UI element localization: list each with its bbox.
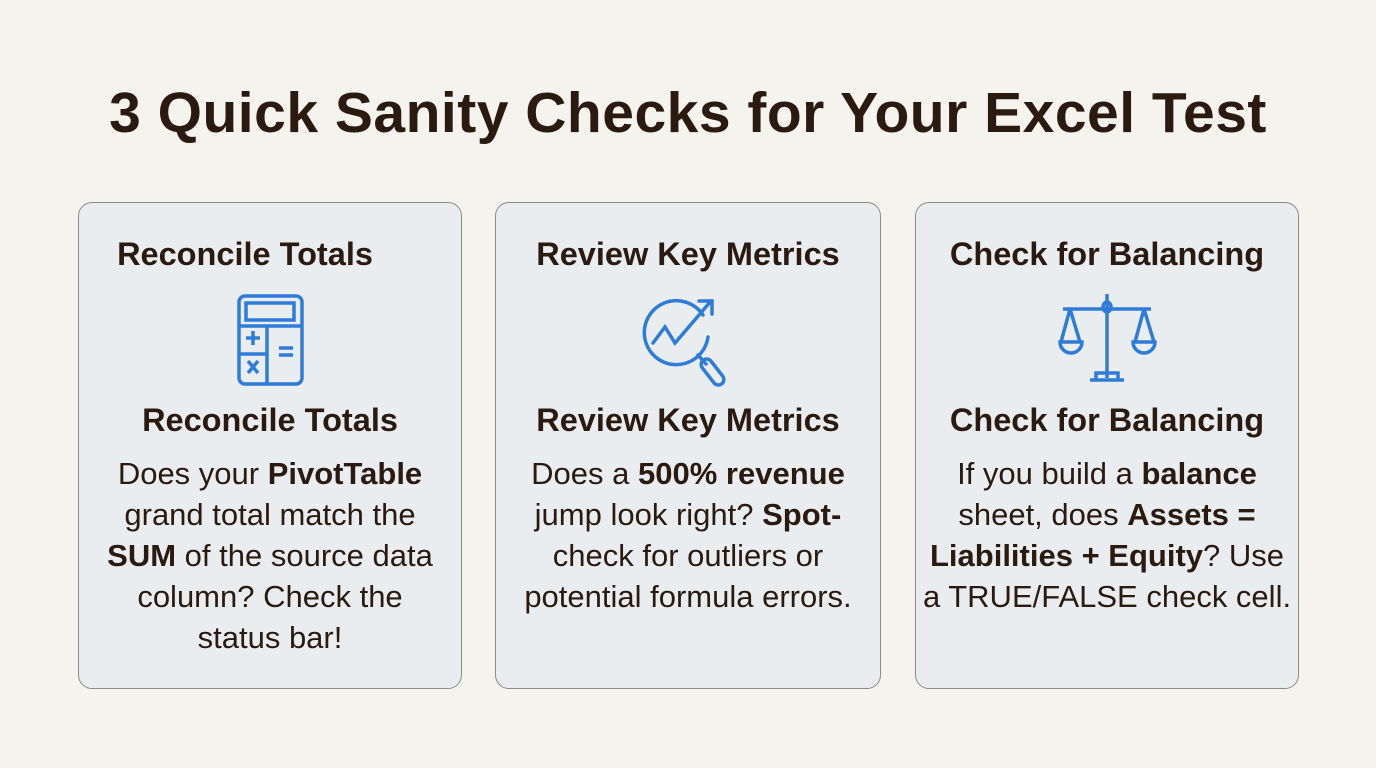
body text: SUM of the source data: [107, 538, 433, 573]
heading: Review Key Metrics: [536, 236, 840, 272]
subheading: Reconcile Totals: [142, 402, 398, 438]
body text: Does a 500% revenue: [531, 456, 845, 491]
subheading: Check for Balancing: [950, 402, 1264, 438]
body text: grand total match the: [124, 497, 416, 532]
heading: Check for Balancing: [950, 236, 1264, 272]
body text: jump look right? Spot-: [535, 497, 841, 532]
body text: potential formula errors.: [524, 579, 852, 614]
icon: scales: [1058, 294, 1157, 382]
body text: column? Check the: [137, 579, 403, 614]
subheading: Review Key Metrics: [536, 402, 840, 438]
heading: Reconcile Totals: [117, 236, 373, 272]
body text: status bar!: [198, 620, 342, 655]
body text: If you build a balance: [957, 456, 1257, 491]
panel: reconcile totals: [78, 202, 462, 689]
body text: [107, 456, 433, 655]
body text: check for outliers or: [553, 538, 823, 573]
title: 3 Quick Sanity Checks for Your Excel Test: [109, 81, 1267, 145]
panel: review key metrics: [495, 202, 881, 689]
body text: Liabilities + Equity? Use: [930, 538, 1284, 573]
icon: magnifier with trend: [642, 298, 726, 387]
body text: [923, 456, 1291, 614]
body text: [524, 456, 852, 614]
panel: check for balancing: [915, 202, 1299, 689]
icon: calculator: [237, 294, 304, 386]
body text: a TRUE/FALSE check cell.: [923, 579, 1291, 614]
body text: sheet, does Assets =: [958, 497, 1256, 532]
body text: Does your PivotTable: [118, 456, 422, 491]
